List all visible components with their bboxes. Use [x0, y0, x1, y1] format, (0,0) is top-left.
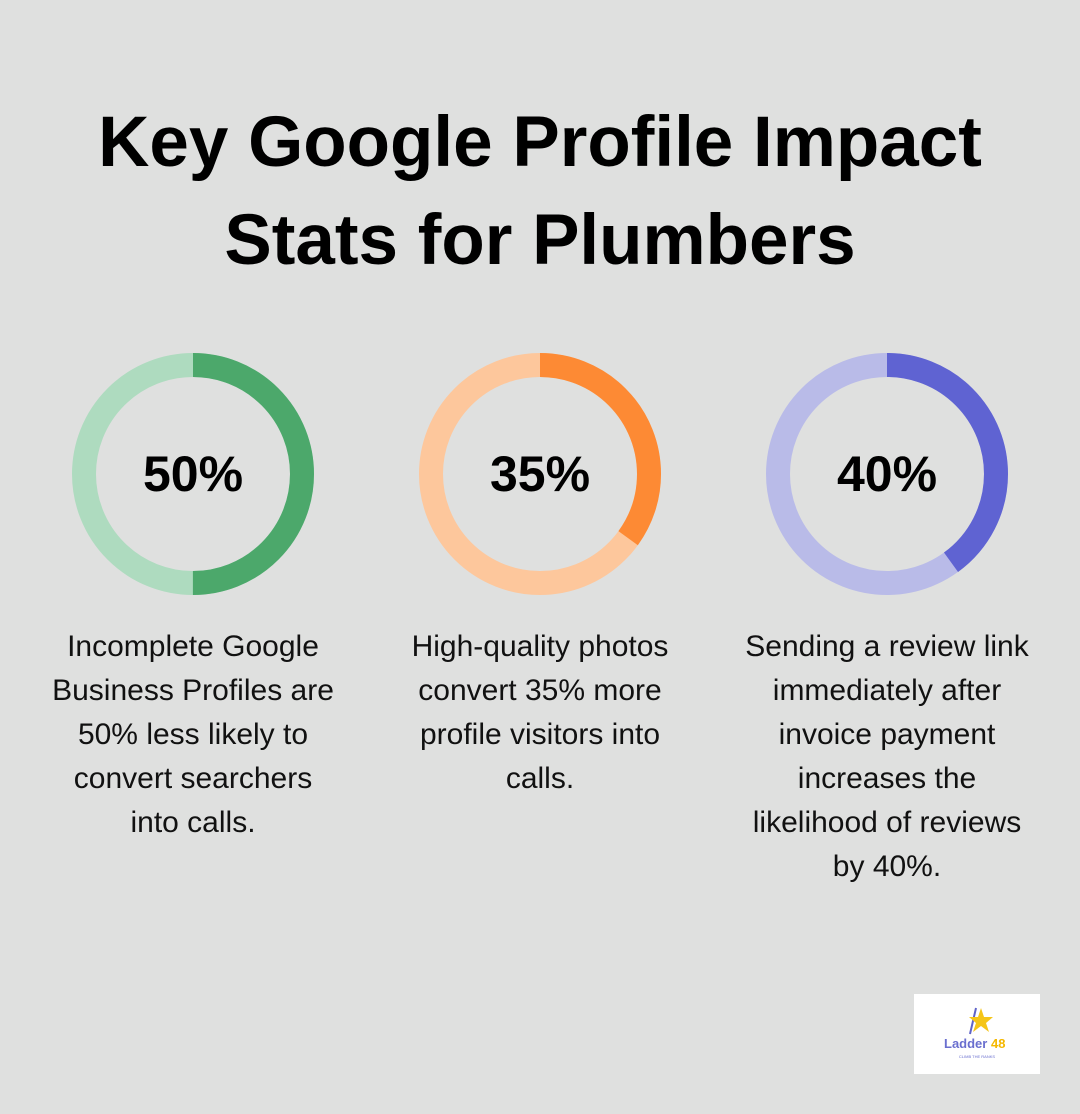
text: stat 3: Sending a review link: [745, 630, 1029, 663]
title: Key Google Profile Impact: [98, 103, 982, 182]
text: stat 2: High-quality photos: [412, 630, 668, 663]
text: stat 1: [52, 630, 334, 839]
text: stat 3: by 40%.: [833, 850, 941, 883]
logo: [914, 994, 1040, 1074]
chart: 50% ring: [72, 353, 314, 595]
logo: Ladder 48: [944, 1036, 1005, 1051]
text: stat 2: calls.: [506, 762, 574, 795]
text: stat 1: Business Profiles are: [52, 674, 334, 707]
text: stat 1: convert searchers: [74, 762, 312, 795]
logo: CLIMB THE RANKS: [959, 1054, 995, 1059]
chart: 40% ring: [766, 353, 1008, 595]
chart: 35% ring: [419, 353, 661, 595]
text: stat 3: invoice payment: [779, 718, 995, 751]
chart: 50% ring: 50%: [143, 446, 243, 502]
text: stat 3: increases the: [798, 762, 976, 795]
title: Stats for Plumbers: [224, 201, 856, 280]
chart: 40% ring: 40%: [837, 446, 937, 502]
text: stat 2: [412, 630, 668, 795]
title: [98, 103, 982, 280]
text: stat 2: convert 35% more: [418, 674, 662, 707]
text: stat 1: Incomplete Google: [67, 630, 319, 663]
text: stat 1: 50% less likely to: [78, 718, 308, 751]
chart: 35% ring: 35%: [490, 446, 590, 502]
text: stat 3: likelihood of reviews: [753, 806, 1021, 839]
text: stat 3: immediately after: [773, 674, 1001, 707]
text: stat 3: [745, 630, 1029, 883]
icon: ladder star: [969, 1008, 993, 1034]
text: stat 2: profile visitors into: [420, 718, 660, 751]
text: stat 1: into calls.: [130, 806, 256, 839]
